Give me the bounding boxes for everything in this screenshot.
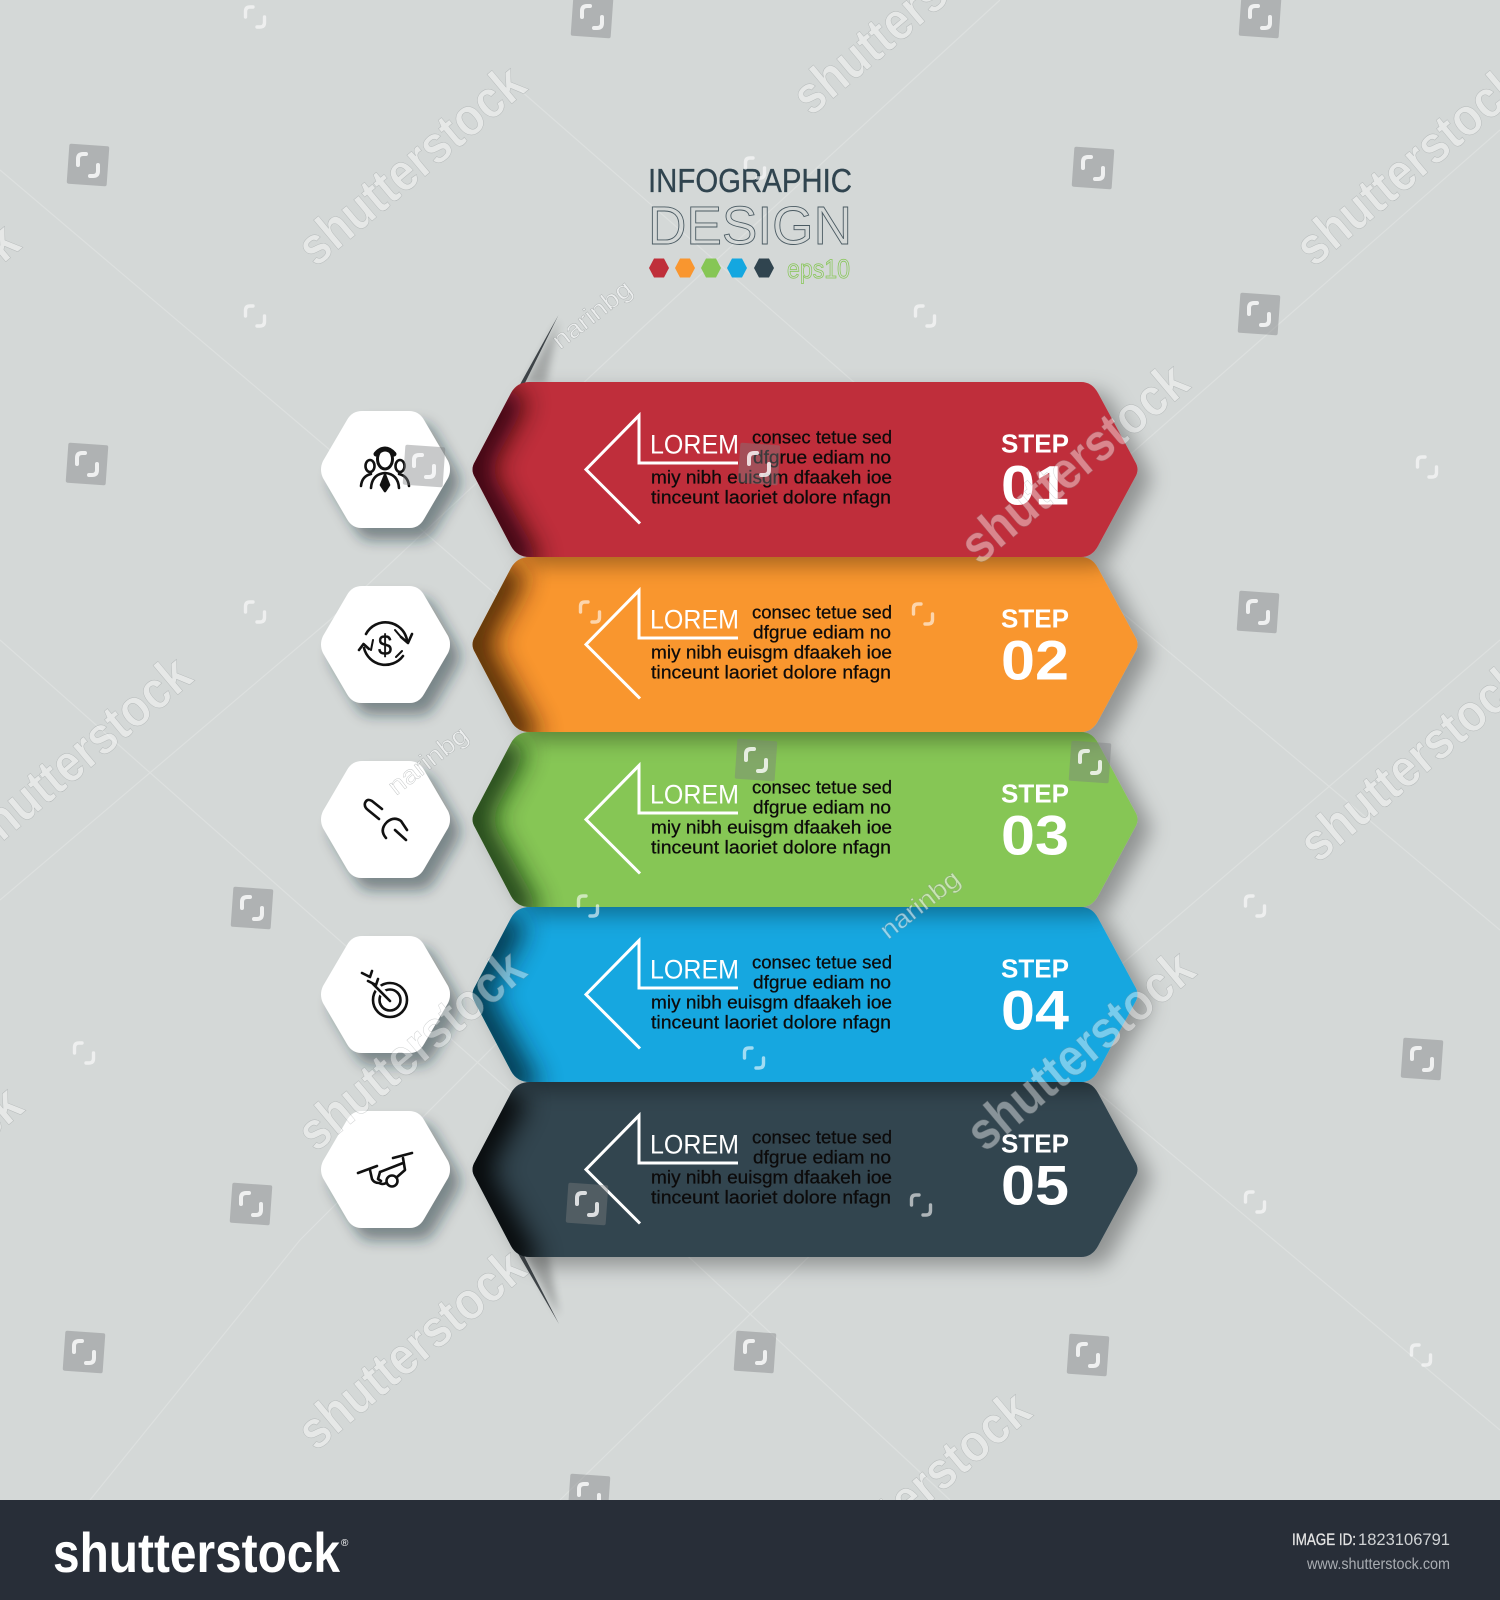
watermarks: narinbg — [874, 865, 966, 945]
body text: tinceunt laoriet dolore nfagn — [651, 1188, 891, 1208]
title: infographic: INFOGRAPHIC — [648, 162, 852, 199]
body text — [651, 602, 892, 682]
body text: dfgrue ediam no — [753, 622, 891, 642]
arrow outline — [586, 416, 738, 524]
watermarks: shutterstock — [949, 351, 1200, 575]
arrow outline — [586, 766, 738, 874]
heading: LOREM — [650, 954, 739, 984]
body text: tinceunt laoriet dolore nfagn — [651, 662, 891, 682]
body text: dfgrue ediam no — [753, 1148, 891, 1168]
body text — [651, 1128, 892, 1208]
body text: dfgrue ediam no — [753, 448, 891, 468]
heading: LOREM — [650, 1130, 739, 1160]
step number: 04 — [1001, 978, 1069, 1042]
body text: consec tetue sed — [752, 428, 892, 448]
step number: 05 — [1001, 1154, 1069, 1216]
hexagon 2 with dollar icon — [321, 586, 450, 703]
body text: tinceunt laoriet dolore nfagn — [651, 838, 891, 858]
image id number: 1823106791 — [1358, 1530, 1450, 1549]
body text — [651, 952, 892, 1032]
watermarks: shutterstock — [955, 938, 1206, 1162]
footer logo: shutterstock — [53, 1521, 341, 1584]
panel: step 5 — [470, 1082, 1138, 1270]
body text: consec tetue sed — [752, 602, 892, 622]
heading: LOREM — [650, 780, 739, 810]
body text: tinceunt laoriet dolore nfagn — [651, 1012, 891, 1032]
eps10 label: eps10 — [787, 254, 850, 284]
arrow outline — [586, 590, 738, 698]
colour hexagon dots — [649, 258, 774, 278]
step label: STEP — [1001, 954, 1069, 984]
step label: STEP — [1001, 778, 1069, 808]
icon: dollar cycle: $ — [378, 630, 392, 662]
body text: miy nibh euisgm dfaakeh ioe — [651, 818, 892, 838]
watermarks: narinbg — [382, 721, 474, 801]
bottom spike — [516, 1250, 559, 1324]
body text: dfgrue ediam no — [753, 972, 891, 992]
watermarks: shutterstock — [286, 938, 537, 1162]
step number: 03 — [1001, 804, 1069, 866]
body text: miy nibh euisgm dfaakeh ioe — [651, 642, 892, 662]
title block — [648, 162, 852, 284]
step number: 02 — [1001, 628, 1069, 692]
band shape — [472, 557, 1138, 732]
body text: tinceunt laoriet dolore nfagn — [651, 488, 891, 508]
image id: IMAGE ID: — [1292, 1530, 1356, 1549]
footer bar — [0, 1500, 1500, 1600]
step label: STEP — [1001, 1128, 1069, 1158]
watermarks: narinbg — [546, 275, 638, 355]
step number: 01 — [1001, 454, 1069, 516]
band shape — [472, 907, 1138, 1082]
body text: miy nibh euisgm dfaakeh ioe — [651, 468, 892, 488]
panel: step 3 — [470, 732, 1138, 920]
band shape — [472, 382, 1138, 557]
left fold shading — [470, 566, 525, 744]
hexagon 5 with handshake icon — [321, 1111, 450, 1228]
title: design: DESIGN — [648, 196, 852, 256]
panel: step 2 — [470, 557, 1138, 744]
arrow outline — [586, 1116, 738, 1224]
panel: step 1 — [470, 382, 1138, 570]
step label: STEP — [1001, 604, 1069, 634]
registered mark: ® — [341, 1538, 349, 1549]
watermarks: shutterstock — [286, 53, 537, 277]
body text: consec tetue sed — [752, 952, 892, 972]
watermarks: shutterstock — [791, 1379, 1042, 1600]
watermarks: shutterstock — [286, 1237, 537, 1461]
body text: consec tetue sed — [752, 1128, 892, 1148]
step label: STEP — [1001, 428, 1069, 458]
website: www.shutterstock.com — [1306, 1556, 1450, 1573]
top spike — [518, 315, 559, 388]
panel: step 4 — [470, 907, 1138, 1094]
heading: LOREM — [650, 604, 739, 634]
left fold shading — [470, 742, 525, 920]
icon: handshake — [358, 1153, 412, 1186]
arrow outline — [586, 940, 738, 1048]
hexagon 4 with target icon — [321, 936, 450, 1053]
body text: miy nibh euisgm dfaakeh ioe — [651, 1168, 892, 1188]
icon: broken link — [365, 800, 407, 840]
left fold shading — [470, 392, 525, 570]
body text — [651, 778, 892, 858]
band shape — [472, 732, 1138, 907]
hexagon 1 with people icon — [321, 411, 450, 528]
body text: consec tetue sed — [752, 778, 892, 798]
body text: miy nibh euisgm dfaakeh ioe — [651, 992, 892, 1012]
left fold shading — [470, 1092, 525, 1270]
hexagon 3 with link icon — [321, 761, 450, 878]
body text — [651, 428, 892, 508]
left fold shading — [470, 916, 525, 1094]
icon: people — [361, 449, 409, 491]
icon: target with arrow — [362, 971, 407, 1017]
band shape — [472, 1082, 1138, 1257]
heading: LOREM — [650, 430, 739, 460]
body text: dfgrue ediam no — [753, 798, 891, 818]
